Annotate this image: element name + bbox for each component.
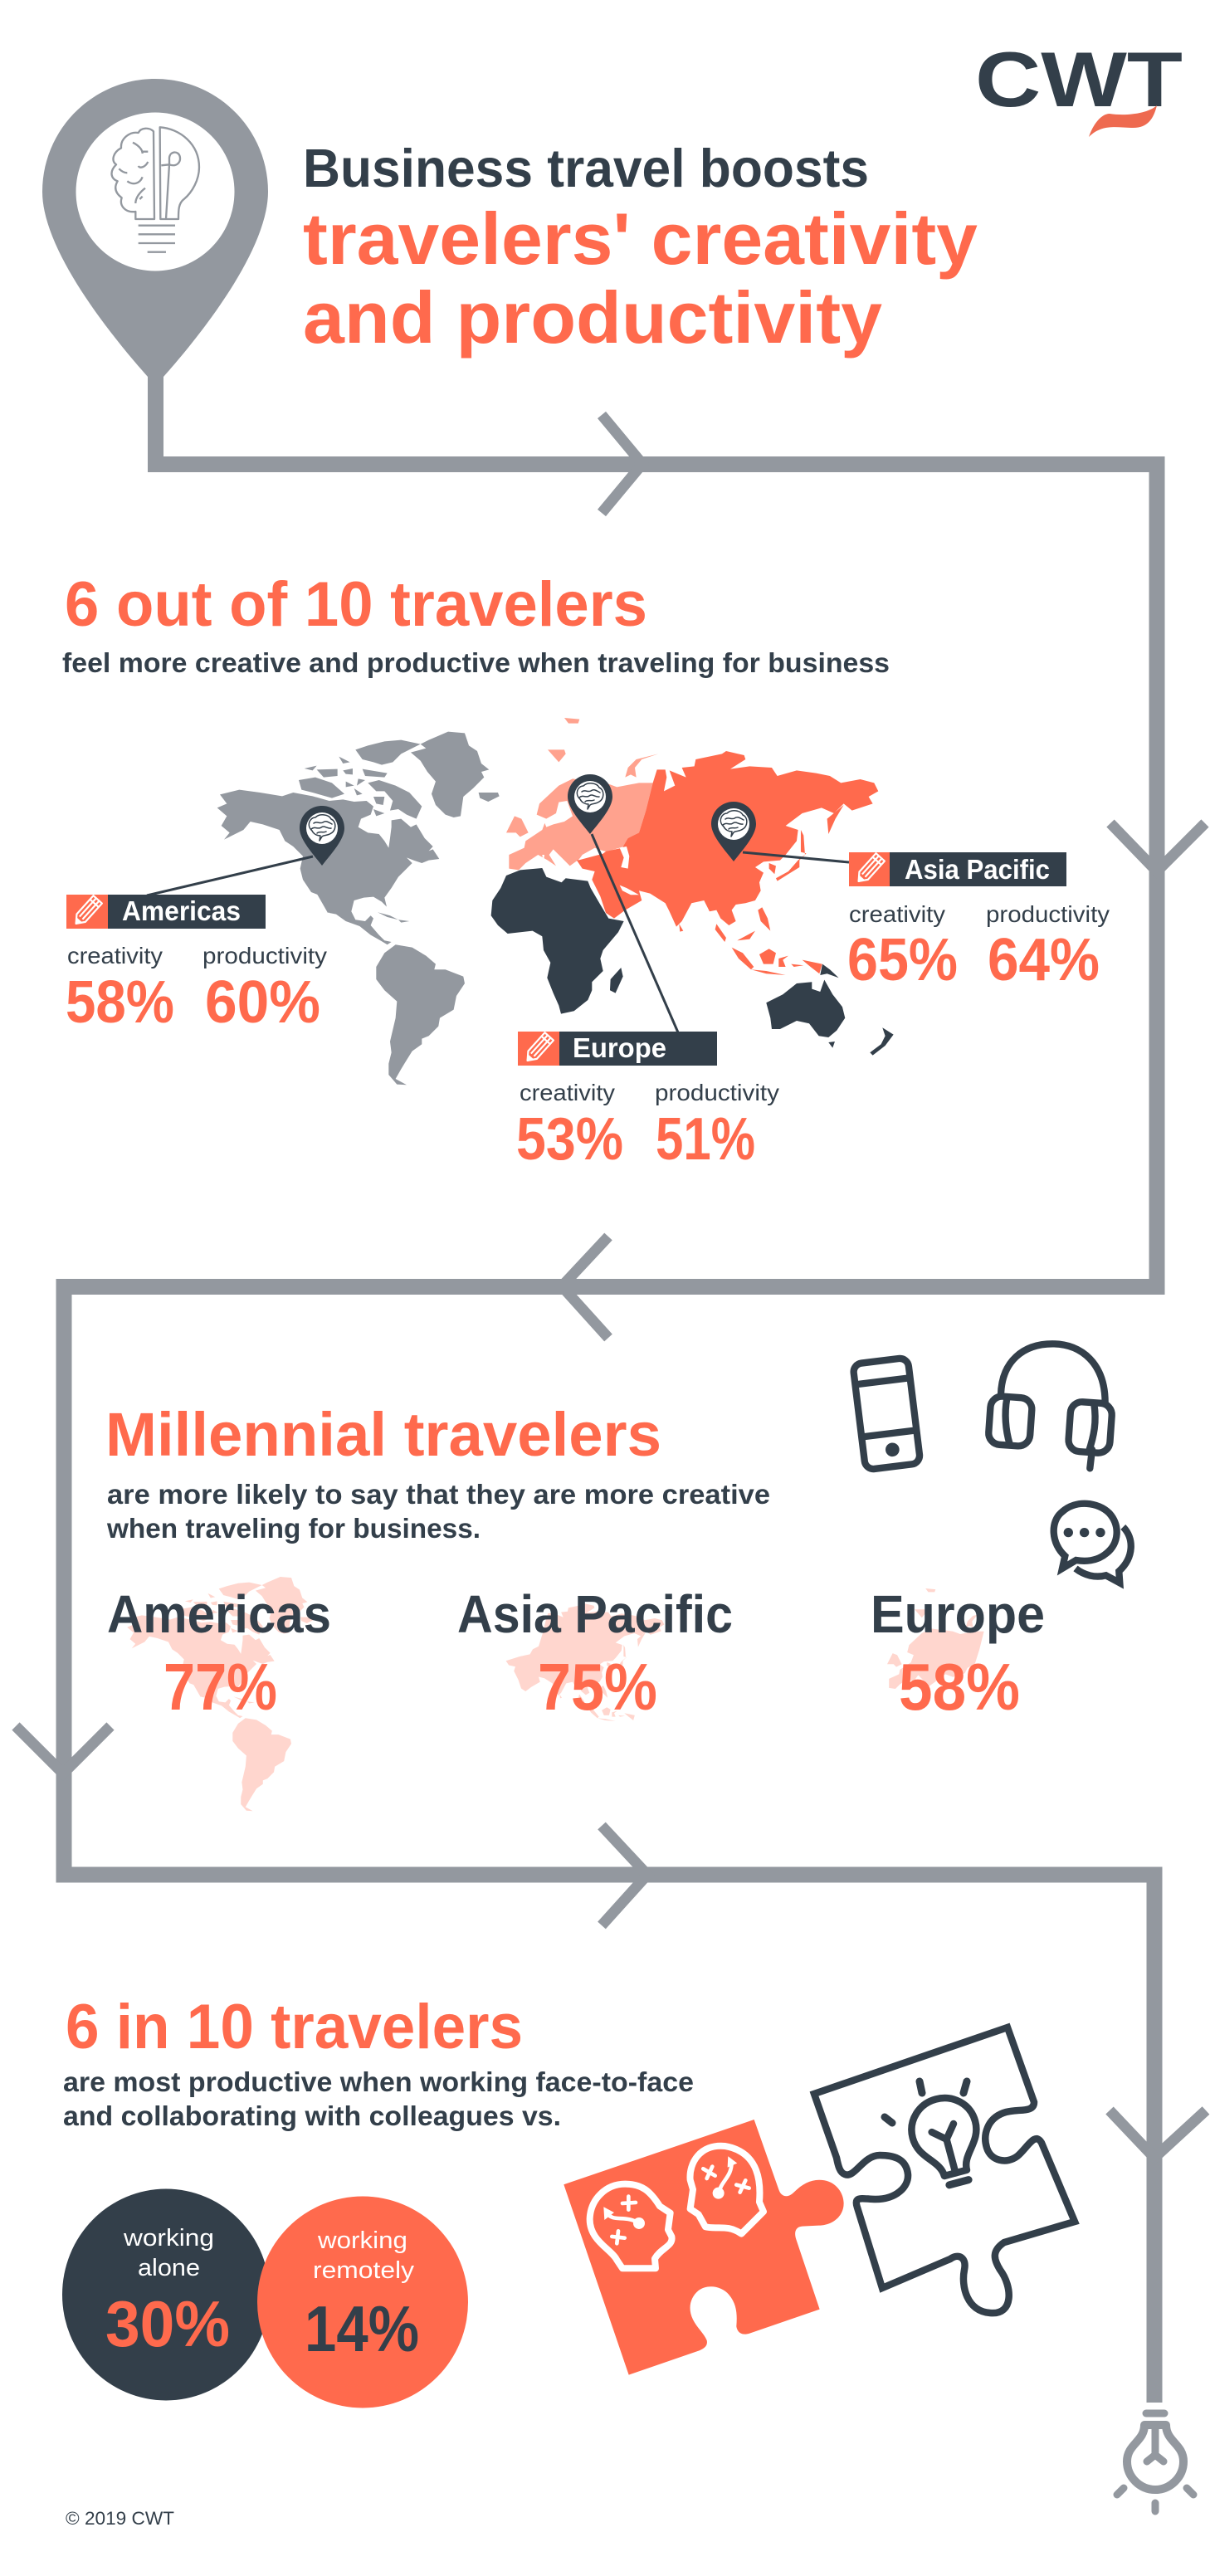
panel: Europe: 53% — [516, 1106, 623, 1173]
icon: headset — [988, 1344, 1113, 1468]
map: Europe — [506, 718, 658, 870]
circle: working alone 30%: working — [123, 2225, 214, 2252]
title — [303, 138, 978, 359]
panel: Europe — [516, 1032, 779, 1173]
stat: Asia Pacific 75%: 75% — [538, 1650, 657, 1724]
icon: Americas pin — [300, 806, 344, 866]
text: are more likely: are more likely to say that they are more creative — [107, 1479, 770, 1510]
circle: working alone 30% — [62, 2189, 270, 2400]
stat: Asia Pacific 75% — [457, 1584, 733, 1724]
panel: Americas: creativity — [67, 943, 163, 968]
panel: Americas: 58% — [66, 969, 174, 1036]
text: are most productive: and collaborating with colleagues vs. — [63, 2100, 561, 2131]
icon: smartphone — [852, 1358, 920, 1470]
copyright: © 2019 CWT — [66, 2508, 174, 2529]
circle: working remotely 14%: 14% — [305, 2292, 419, 2365]
leader line: Americas — [147, 856, 313, 895]
circle: working alone 30%: alone — [138, 2255, 200, 2281]
stat: Europe 58%: Europe — [871, 1584, 1045, 1644]
panel: Europe: creativity — [520, 1080, 615, 1105]
icon: chat bubbles — [1054, 1504, 1131, 1583]
heading: Millennial travelers: Millennial travelers — [105, 1400, 661, 1469]
circle: working remotely 14%: remotely — [313, 2257, 415, 2284]
text: feel more creative: feel more creative and productive when traveling for business — [62, 647, 890, 678]
panel: Asia Pacific: 64% — [988, 927, 1100, 993]
pale map: Asia Pacific — [506, 1603, 664, 1721]
title: Business travel boosts — [303, 138, 869, 198]
title: and productivity — [303, 276, 882, 359]
text: are more likely: when traveling for business. — [106, 1513, 481, 1544]
map: Africa and Oceania — [491, 868, 894, 1056]
panel: Asia Pacific: 65% — [847, 927, 958, 993]
panel: Americas — [66, 895, 327, 1036]
text: are most productive: are most productive when working face-to-face — [63, 2066, 694, 2097]
heading: 6 in 10 travelers: 6 in 10 travelers — [66, 1992, 523, 2062]
pale map: Europe — [887, 1588, 988, 1689]
logo: CWT: CWT — [975, 36, 1183, 123]
panel: Americas: Americas — [122, 895, 241, 926]
circle: working remotely 14%: working — [317, 2227, 407, 2254]
route line connecting the sections — [16, 373, 1206, 2403]
pale map: Americas — [127, 1577, 315, 1811]
heading: 6 out of 10 travelers: 6 out of 10 travelers — [65, 569, 647, 640]
circle: working alone 30%: 30% — [105, 2287, 230, 2360]
leader line: Asia Pacific — [743, 852, 849, 862]
stat: Europe 58% — [871, 1584, 1045, 1724]
panel: Americas: 60% — [205, 969, 320, 1036]
panel: Asia Pacific: creativity — [849, 901, 945, 927]
stat: Europe 58%: 58% — [899, 1650, 1020, 1724]
panel: Asia Pacific: productivity — [986, 901, 1110, 927]
leader line: Europe — [592, 834, 678, 1032]
circle: working remotely 14% — [257, 2196, 468, 2408]
icon: Europe pin — [568, 774, 612, 834]
panel: Americas: productivity — [202, 943, 327, 968]
stat: Asia Pacific 75%: Asia Pacific — [457, 1584, 733, 1644]
panel: Europe: 51% — [656, 1106, 755, 1173]
icon: brain bulb location pin — [42, 79, 268, 377]
icon: outlined puzzle piece with bulb — [814, 2027, 1075, 2313]
text: are more likely — [106, 1479, 770, 1544]
stat: Americas 77%: 77% — [163, 1650, 277, 1724]
panel: Asia Pacific — [847, 852, 1110, 993]
map: Asia — [542, 751, 878, 975]
panel: Europe: Europe — [573, 1032, 666, 1063]
map: Americas — [217, 732, 500, 1085]
icon: coral puzzle piece with heads — [564, 2120, 844, 2375]
panel: Asia Pacific: Asia Pacific — [905, 854, 1050, 885]
stat: Americas 77%: Americas — [107, 1584, 331, 1644]
panel: Europe: productivity — [655, 1080, 779, 1105]
title: travelers' creativity — [303, 198, 978, 280]
icon: Asia Pacific pin — [711, 802, 756, 861]
text: are most productive — [63, 2066, 694, 2131]
stat: Americas 77% — [107, 1584, 331, 1724]
icon: light bulb at end of route — [1117, 2413, 1193, 2511]
world map — [217, 718, 894, 1085]
